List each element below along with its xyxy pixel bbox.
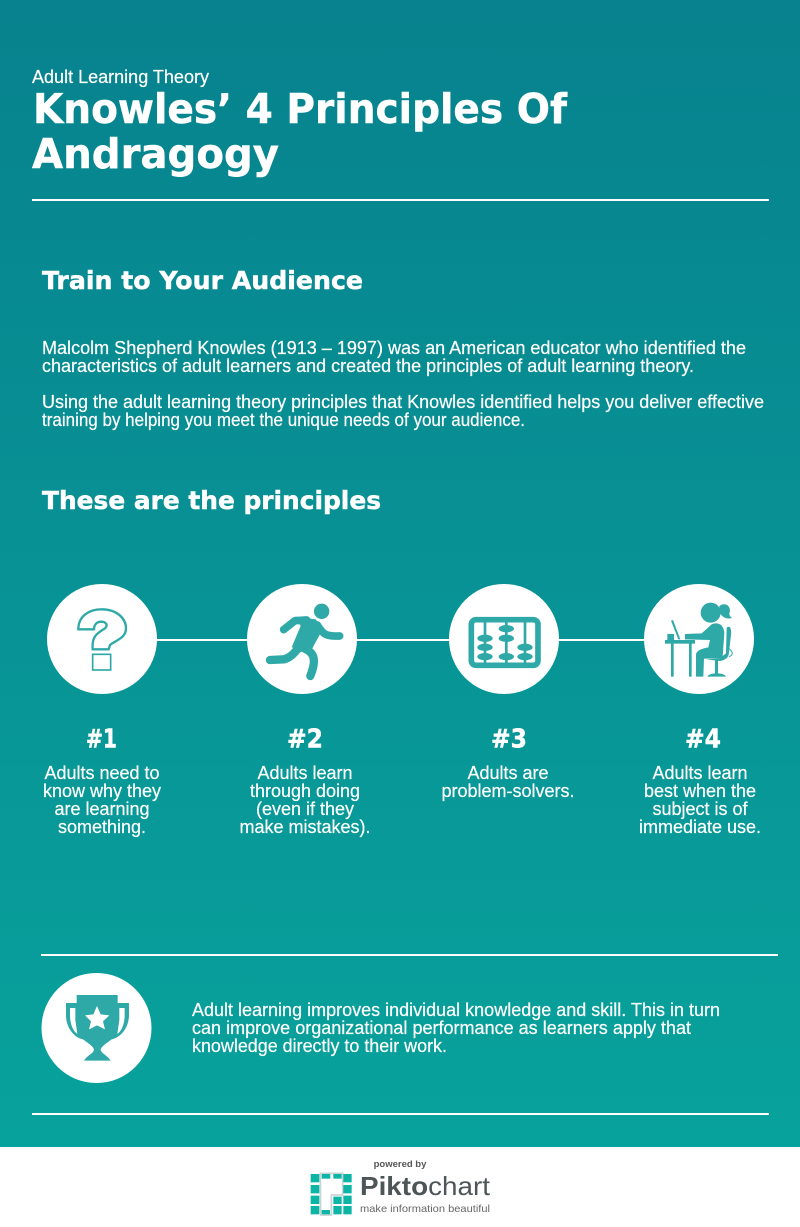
principle 2 text: Adults learn bbox=[257, 763, 353, 783]
principle 4 text bbox=[639, 724, 761, 837]
principle 4 text: immediate use. bbox=[639, 817, 761, 837]
principle 1 icon: question mark bbox=[47, 584, 157, 694]
principle 4 text: subject is of bbox=[652, 799, 749, 819]
principle 2 text bbox=[239, 724, 371, 837]
principle 1 text: know why they bbox=[43, 781, 161, 801]
subtitle: Adult Learning Theory bbox=[32, 67, 209, 87]
principle 2 text: through doing bbox=[250, 781, 360, 801]
principle 4 text: Adults learn bbox=[652, 763, 748, 783]
heading: these are the principles: These are the principles bbox=[42, 486, 381, 515]
principle 3 text: problem-solvers. bbox=[441, 781, 575, 801]
heading: train to your audience: Train to Your Audience bbox=[42, 266, 363, 295]
principle 4 icon: woman at desk bbox=[644, 584, 754, 694]
footer: piktochart logo: powered by bbox=[374, 1159, 427, 1170]
principle 3 text: #3 bbox=[491, 724, 527, 754]
icon: trophy bbox=[42, 973, 152, 1083]
footer: piktochart logo bbox=[0, 1147, 800, 1227]
principle 1 text: are learning bbox=[54, 799, 150, 819]
principle 1 text: something. bbox=[58, 817, 146, 837]
principle 2 text: (even if they bbox=[256, 799, 354, 819]
closing text bbox=[192, 1000, 720, 1056]
principle 3 icon: abacus bbox=[449, 584, 559, 694]
principle 1 text bbox=[43, 724, 161, 837]
intro text: Malcolm Shepherd Knowles (1913 – 1997) was an American educator who identified the bbox=[42, 338, 746, 358]
closing text: Adult learning improves individual knowledge and skill. This in turn bbox=[192, 1000, 720, 1020]
intro text: Using the adult learning theory principles that Knowles identified helps you deliver effective bbox=[42, 392, 764, 412]
title: Andragogy bbox=[32, 130, 279, 178]
intro text: training by helping you meet the unique needs of your audience. bbox=[42, 410, 525, 430]
principle 1 text: Adults need to bbox=[44, 763, 160, 783]
principle 2 text: #2 bbox=[287, 724, 323, 754]
principle 1 text: #1 bbox=[86, 724, 117, 754]
title bbox=[32, 85, 568, 178]
principle 2 text: make mistakes). bbox=[239, 817, 371, 837]
principle 4 text: best when the bbox=[644, 781, 756, 801]
intro text: characteristics of adult learners and created the principles of adult learning theory. bbox=[42, 356, 694, 376]
footer: piktochart logo: Piktochart bbox=[360, 1171, 491, 1201]
principle 3 text bbox=[441, 724, 575, 801]
footer: piktochart logo: make information beautiful bbox=[360, 1203, 490, 1215]
principle 3 text: Adults are bbox=[467, 763, 549, 783]
closing text: can improve organizational performance as learners apply that bbox=[192, 1018, 691, 1038]
closing text: knowledge directly to their work. bbox=[192, 1036, 447, 1056]
principle 4 text: #4 bbox=[685, 724, 721, 754]
intro text bbox=[42, 338, 764, 430]
principle 2 icon: runner bbox=[247, 584, 357, 694]
logo mark bbox=[311, 1173, 352, 1215]
title: Knowles’ 4 Principles Of bbox=[33, 85, 568, 133]
